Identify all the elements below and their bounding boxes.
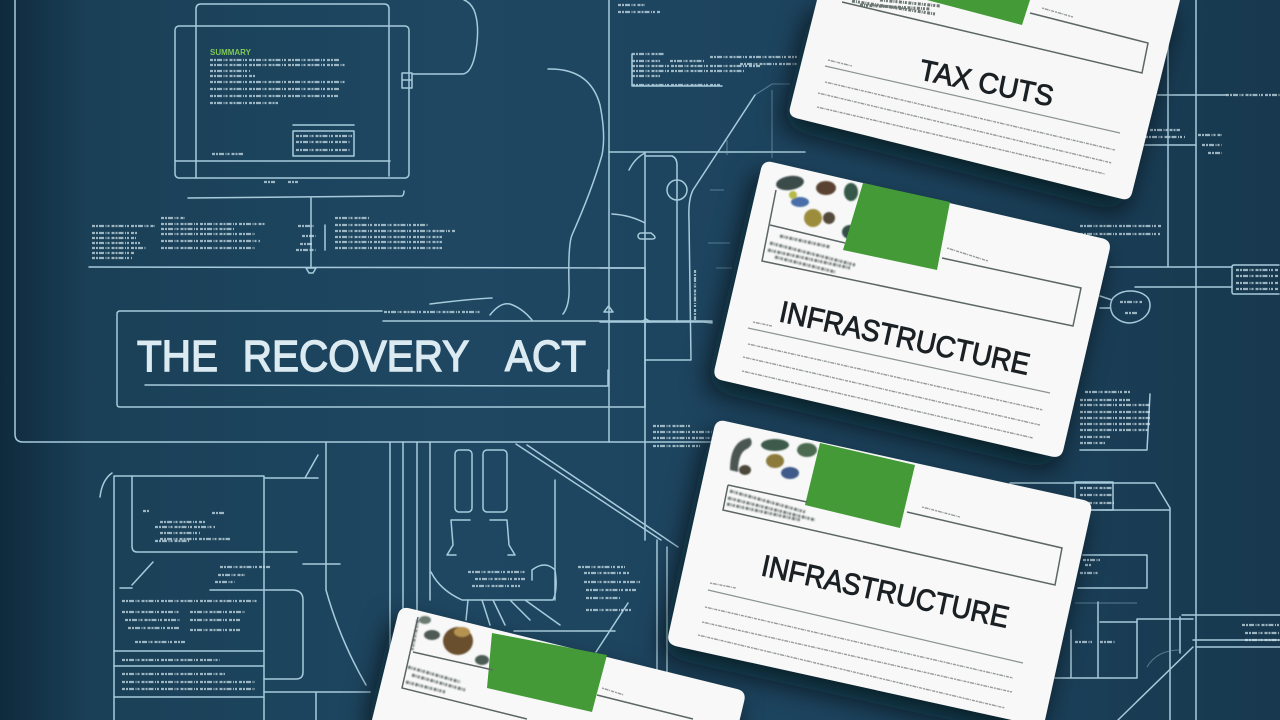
green block <box>805 443 915 528</box>
card: tax cuts <box>790 0 1180 199</box>
card body text <box>742 344 1043 438</box>
title: ACT <box>505 331 586 380</box>
outer frame <box>15 0 720 442</box>
card: infrastructure upper <box>714 162 1110 457</box>
lower middle diagram <box>390 442 678 692</box>
lower left panel <box>100 442 370 720</box>
green block <box>843 183 950 270</box>
title box <box>117 311 645 407</box>
card heading: INFRASTRUCTURE <box>759 550 1012 635</box>
card body text <box>817 82 1115 174</box>
card illustration <box>730 438 817 479</box>
card illustration <box>419 616 489 665</box>
green block <box>927 0 1030 25</box>
title: RECOVERY <box>243 331 469 380</box>
card: bottom partial <box>372 608 745 720</box>
title: THE <box>137 331 218 380</box>
right side diagram <box>1010 0 1280 720</box>
tablet heading: SUMMARY <box>210 47 251 57</box>
card frame <box>723 485 1062 585</box>
card frame <box>842 2 1148 73</box>
card: infrastructure lower <box>668 421 1091 720</box>
card body text <box>698 607 1013 708</box>
upper middle diagram <box>600 5 805 446</box>
card frame <box>402 617 693 719</box>
tablet diagram <box>175 0 478 268</box>
card image strip <box>852 0 940 14</box>
card heading: INFRASTRUCTURE <box>777 296 1033 382</box>
connecting curve <box>548 69 604 314</box>
spec text blocks <box>92 226 155 258</box>
card heading: TAX CUTS <box>917 55 1056 113</box>
long divider <box>89 267 645 407</box>
card frame <box>762 190 1081 326</box>
green block <box>487 633 607 712</box>
card illustration <box>775 174 858 239</box>
